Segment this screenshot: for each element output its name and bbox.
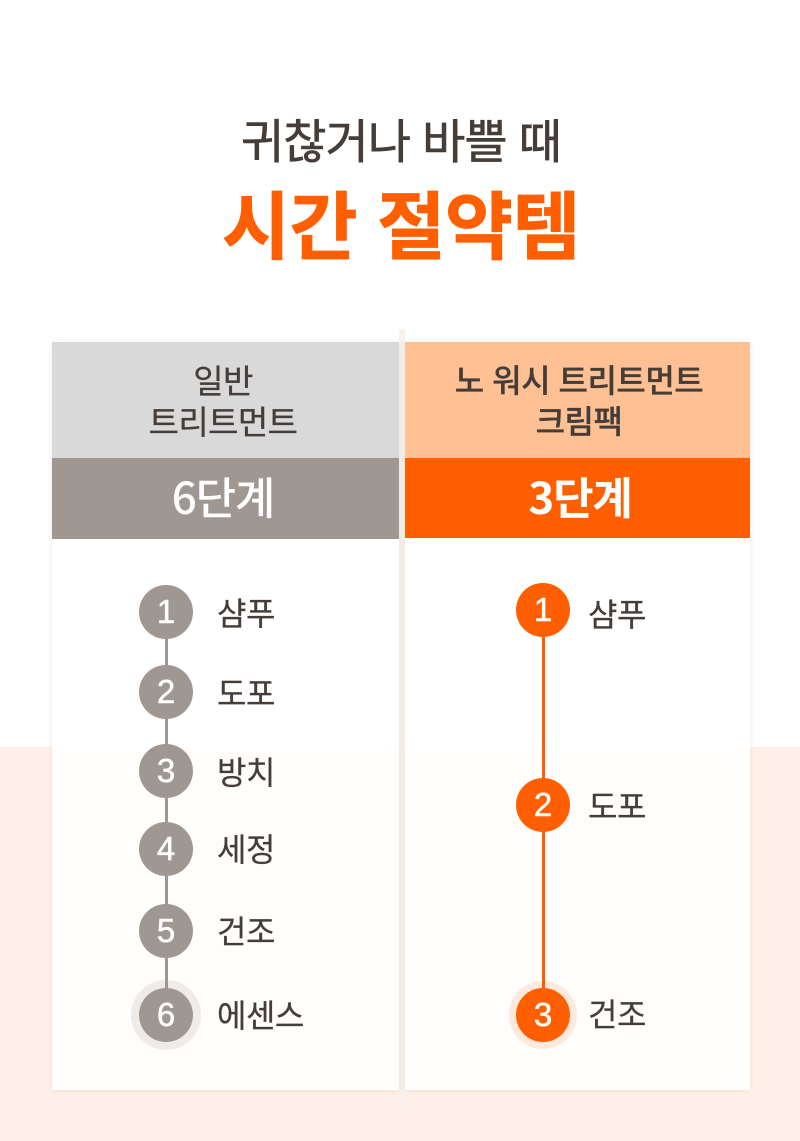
number 3 [516,988,570,1042]
label: 건조 [588,990,646,1036]
header label: regular treatment [149,355,297,444]
no-wash step 3: dry [509,981,646,1049]
connector line: regular steps [165,612,168,1012]
label: 에센스 [217,991,304,1037]
header label: no-wash treatment: 크림팩 [536,397,622,443]
step 6: essence [131,980,304,1050]
number 3: 3 [534,996,552,1033]
panel: regular treatment [52,342,399,1090]
label: 방치 [217,748,275,794]
no-wash step 1: shampoo [516,583,646,637]
panel tint [405,747,750,1090]
number 1: 1 [534,591,552,628]
number 1: 1 [157,593,175,630]
background band [0,747,800,1141]
column divider [399,329,405,1106]
step 2: apply [139,665,275,719]
number 2: 2 [534,786,552,823]
number 2: 2 [157,673,175,710]
step count label: 6 steps: 6단계 [172,463,274,527]
step count bar: 3 steps [405,458,750,538]
label: 도포 [588,782,646,828]
panel tint [52,747,399,1090]
header label: regular treatment: 트리트먼트 [149,396,297,444]
header label: regular treatment: 일반 [193,355,253,403]
number 4 [139,822,193,876]
number 5: 5 [157,912,175,949]
title line 1: 귀찮거나 바쁠 때 [241,104,561,172]
number 2 [139,665,193,719]
header label: no-wash treatment: 노 워시 트리트먼트 [455,356,703,402]
label: 샴푸 [588,590,646,636]
label: 건조 [217,907,275,953]
no-wash step 2: apply [516,778,646,832]
step count label: 3 steps: 3단계 [528,463,632,527]
panel: no-wash treatment [405,342,750,1090]
number 6 [139,988,193,1042]
header label: no-wash treatment [455,356,703,443]
number 4: 4 [157,830,175,867]
step 3: wait [139,744,275,798]
number 1 [516,583,570,637]
number 1 [139,585,193,639]
step 1: shampoo [139,585,275,639]
number 3 [139,744,193,798]
number 2 [516,778,570,832]
label: 도포 [217,669,275,715]
title line 2: 시간 절약템 [222,168,580,275]
connector line: no-wash steps [542,612,545,1012]
step count bar: 6 steps [52,458,399,539]
number 3: 3 [157,752,175,789]
step 5: dry [139,904,275,958]
header: regular treatment [52,342,399,458]
label: 샴푸 [217,589,275,635]
step 4: rinse [139,822,275,876]
number 6: 6 [157,996,175,1033]
header: no-wash treatment [405,342,750,458]
label: 세정 [217,825,275,871]
number 5 [139,904,193,958]
